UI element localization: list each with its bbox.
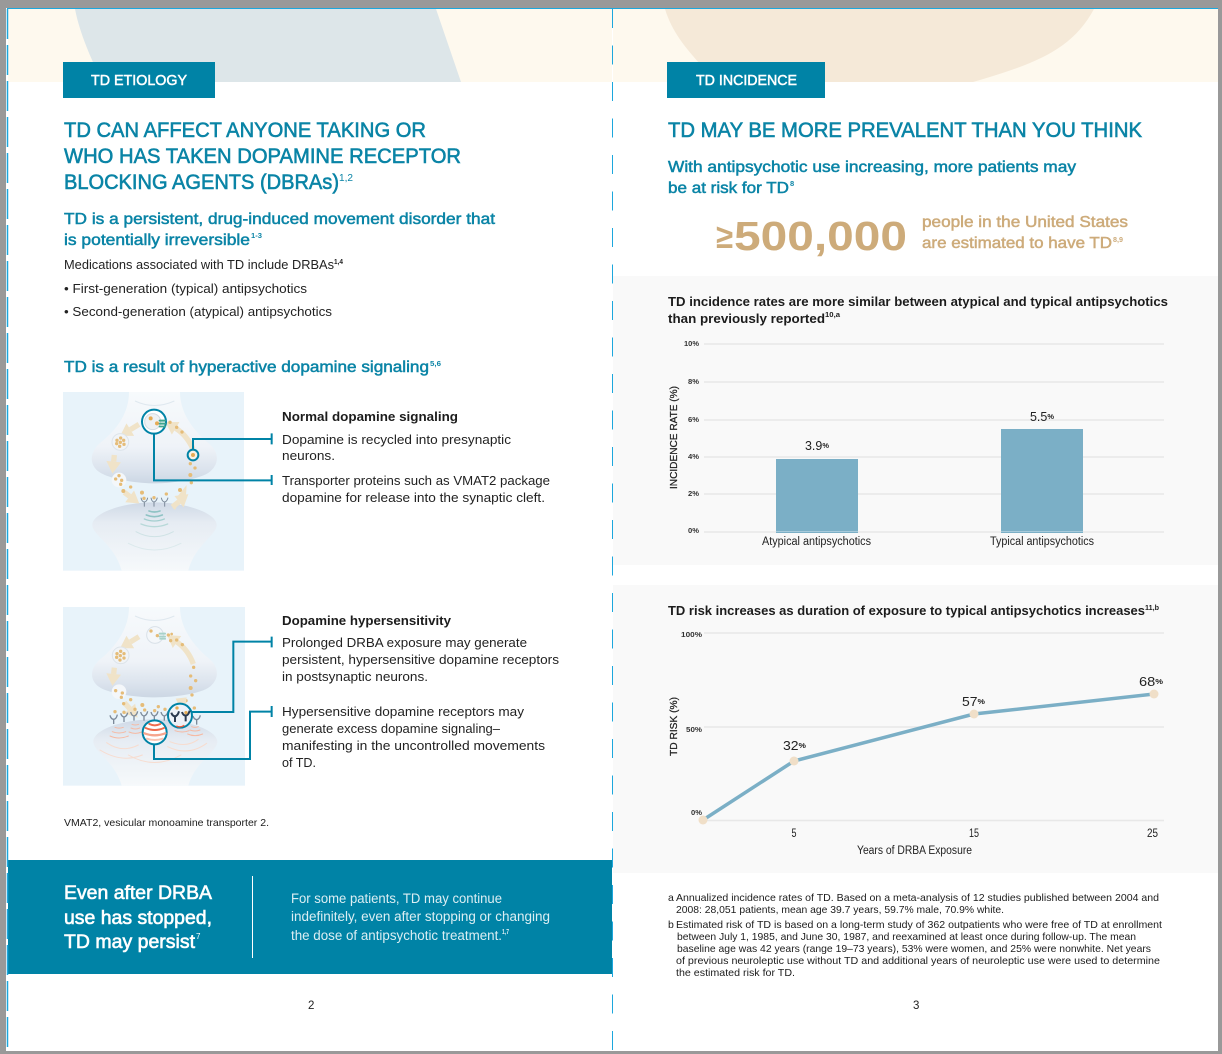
bar: typical antipsychotics 5.5% <box>990 410 1094 548</box>
callout: hypersensitive receptors and excess signaling <box>143 637 272 759</box>
heading: TD can affect anyone <box>64 118 461 194</box>
key statistic: 500,000 people <box>716 213 1128 259</box>
page number 3: 3 <box>913 1000 919 1012</box>
key statistic: 500,000 people: are estimated to have TD <box>922 235 1112 252</box>
text block: dopamine hypersensitivity: Prolonged DRBA exposure may generate <box>282 635 527 650</box>
section tab: TD incidence <box>667 62 825 98</box>
line series: TD risk by exposure: % <box>978 697 985 706</box>
heading: more prevalent: TD MAY BE MORE PREVALENT THAN YOU THINK <box>668 118 1143 142</box>
text block: dopamine hypersensitivity: of TD. <box>282 755 316 770</box>
heading: TD can affect anyone: WHO HAS TAKEN DOPAMINE RECEPTOR <box>64 144 461 168</box>
panel: incidence rate bar chart <box>613 276 1218 565</box>
chart title: 11,b <box>1145 603 1159 612</box>
y axis labels: 10% <box>684 339 699 348</box>
bar: atypical antipsychotics 3.9%: % <box>822 441 829 450</box>
section tab: TD etiology <box>63 62 215 98</box>
text block: dopamine hypersensitivity: Dopamine hypersensitivity <box>282 613 452 628</box>
x axis labels: 5 <box>792 828 796 840</box>
subheading: persistent movement disorder <box>64 211 496 249</box>
heading: TD can affect anyone: BLOCKING AGENTS (DBRAs) <box>64 170 339 194</box>
panel: right page, TD incidence <box>613 9 1218 1012</box>
text block: dopamine hypersensitivity: Hypersensitive dopamine receptors may <box>282 704 525 719</box>
y axis labels: 6% <box>688 415 699 424</box>
text block: normal dopamine signaling: Transporter proteins such as VMAT2 package <box>282 473 550 488</box>
subheading: persistent movement disorder: TD is a persistent, drug-induced movement disorder that <box>64 211 496 228</box>
subheading: hyperactive dopamine signaling: 5,6 <box>430 359 441 368</box>
text block: medications list: • First-generation (typical) antipsychotics <box>64 281 308 296</box>
y axis labels <box>681 630 702 817</box>
subheading: persistent movement disorder: 1-3 <box>251 231 262 240</box>
line series: TD risk by exposure: % <box>799 741 806 750</box>
text block: normal dopamine signaling: neurons. <box>282 448 335 463</box>
key statistic: 500,000 people: 8,9 <box>1113 235 1123 244</box>
callout body text: For some patients, TD may continue <box>291 891 502 906</box>
footnotes a and b <box>668 892 1162 979</box>
footnotes a and b: 2008: 28,051 patients, mean age 39.7 years, 59.7% male, 70.9% white. <box>676 904 1004 916</box>
page number 2: 2 <box>308 1000 314 1012</box>
text block: normal dopamine signaling: Normal dopamine signaling <box>282 409 458 424</box>
bar: typical antipsychotics 5.5%: % <box>1047 412 1054 421</box>
section tab: TD incidence: TD INCIDENCE <box>696 72 797 89</box>
footnote: VMAT2 abbreviation: VMAT2, vesicular monoamine transporter 2. <box>64 817 269 829</box>
line series: TD risk by exposure: 32 <box>783 739 797 753</box>
callout body text: the dose of antipsychotic treatment. <box>291 928 502 943</box>
chart title: than previously reported <box>668 311 825 326</box>
x axis labels: 15 <box>969 828 979 840</box>
text block: dopamine hypersensitivity: persistent, hypersensitive dopamine receptors <box>282 652 560 667</box>
text block: dopamine hypersensitivity: manifesting in the uncontrolled movements <box>282 738 546 753</box>
text block: medications list <box>64 257 344 319</box>
footnotes a and b: Annualized incidence rates of TD. Based on a meta-analysis of 12 studies published between 2004 and <box>676 892 1159 904</box>
callout headline: Even after DRBA <box>64 882 212 904</box>
header banner, right <box>613 9 1218 82</box>
text block: normal dopamine signaling: Dopamine is recycled into presynaptic <box>282 432 512 447</box>
text block: medications list: Medications associated with TD include DRBAs <box>64 257 334 272</box>
callout body text <box>291 891 550 943</box>
bar: atypical antipsychotics 3.9%: 3.9 <box>805 439 822 453</box>
text block: normal dopamine signaling <box>282 409 550 505</box>
footnotes a and b: the estimated risk for TD. <box>676 967 795 979</box>
y axis labels: 8% <box>688 377 699 386</box>
x axis labels <box>792 828 1158 857</box>
subheading: antipsychotic use increasing <box>668 159 1076 197</box>
callout body text: 1,7 <box>502 927 509 936</box>
y axis title: TD RISK (%) <box>668 697 680 756</box>
callout band: TD may persist <box>8 860 612 974</box>
x axis labels: 25 <box>1147 828 1158 840</box>
footnotes a and b: baseline age was 42 years (range 19–73 years), 53% were women, and 25% were nonwhite. Net years <box>677 943 1151 955</box>
illustration: dopamine hypersensitivity synapse <box>63 607 245 786</box>
subheading: persistent movement disorder: is potentially irreversible <box>64 232 250 249</box>
chart title <box>668 294 1168 326</box>
chart title: TD incidence rates are more similar between atypical and typical antipsychotics <box>668 294 1168 309</box>
subheading: antipsychotic use increasing: With antipsychotic use increasing, more patients may <box>668 159 1076 176</box>
x axis labels: Years of DRBA Exposure <box>857 845 972 857</box>
footnotes a and b: Estimated risk of TD is based on a long-term study of 362 outpatients who were free of TD at enrollment <box>676 919 1162 931</box>
y axis labels <box>684 339 699 535</box>
line series: TD risk by exposure: 57 <box>962 695 976 709</box>
illustration: normal dopamine signaling synapse <box>63 392 244 571</box>
y axis title: INCIDENCE RATE (%) <box>668 386 680 489</box>
y axis labels: 0% <box>688 526 699 535</box>
text block: medications list: 1,4 <box>334 257 344 266</box>
line series: TD risk by exposure <box>698 675 1163 824</box>
section tab: TD etiology: TD ETIOLOGY <box>91 72 187 89</box>
chart title: TD risk increases as duration of exposure to typical antipsychotics increases <box>668 603 1145 618</box>
y axis labels: 50% <box>686 725 702 734</box>
subheading: hyperactive dopamine signaling: TD is a result of hyperactive dopamine signaling <box>64 359 429 376</box>
line series: TD risk by exposure: % <box>1155 677 1163 686</box>
callout headline: use has stopped, <box>64 907 212 929</box>
footnotes a and b: a <box>668 892 674 904</box>
callout headline: 7 <box>196 932 201 941</box>
bar: atypical antipsychotics 3.9%: Atypical antipsychotics <box>762 536 871 548</box>
header banner, left <box>8 9 612 82</box>
bar: typical antipsychotics 5.5%: 5.5 <box>1030 410 1047 424</box>
text block: normal dopamine signaling: dopamine for release into the synaptic cleft. <box>282 490 545 505</box>
footnotes a and b: between July 1, 1985, and June 30, 1987, and reexamined at least once during follow-up. The mean <box>677 931 1136 943</box>
callout headline: TD may persist <box>64 931 196 953</box>
y axis labels: 2% <box>688 489 699 498</box>
key statistic: 500,000 people: 500,000 <box>734 213 907 259</box>
panel: left page, TD etiology <box>8 9 612 1012</box>
footnotes a and b: b <box>668 919 674 931</box>
bar: atypical antipsychotics 3.9% <box>762 439 871 548</box>
heading: TD can affect anyone: 1,2 <box>339 173 353 184</box>
y axis labels: 100% <box>681 630 702 639</box>
text block: dopamine hypersensitivity: in postsynaptic neurons. <box>282 669 428 684</box>
panel: TD risk line chart <box>613 585 1218 873</box>
chart title: 10,a <box>825 310 841 319</box>
key statistic: 500,000 people: people in the United States <box>922 214 1128 231</box>
subheading: antipsychotic use increasing: be at risk for TD <box>668 180 789 197</box>
line series: TD risk by exposure: 68 <box>1139 675 1153 689</box>
y axis labels: 0% <box>691 808 702 817</box>
subheading: antipsychotic use increasing: 8 <box>790 179 794 188</box>
text block: medications list: • Second-generation (atypical) antipsychotics <box>64 304 333 319</box>
key statistic: 500,000 people: ≥ <box>716 218 733 256</box>
footnotes a and b: of previous neuroleptic use without TD and additional years of neuroleptic use were used to determine <box>676 955 1160 967</box>
heading: TD can affect anyone: TD CAN AFFECT ANYONE TAKING OR <box>64 118 426 142</box>
bar: typical antipsychotics 5.5%: Typical antipsychotics <box>990 536 1094 548</box>
callout: vesicle zoom with transporter <box>142 410 272 485</box>
text block: dopamine hypersensitivity <box>282 613 560 770</box>
text block: dopamine hypersensitivity: generate excess dopamine signaling– <box>282 721 501 736</box>
callout headline <box>64 882 212 953</box>
callout body text: indefinitely, even after stopping or changing <box>291 909 550 924</box>
y axis labels: 4% <box>688 452 699 461</box>
